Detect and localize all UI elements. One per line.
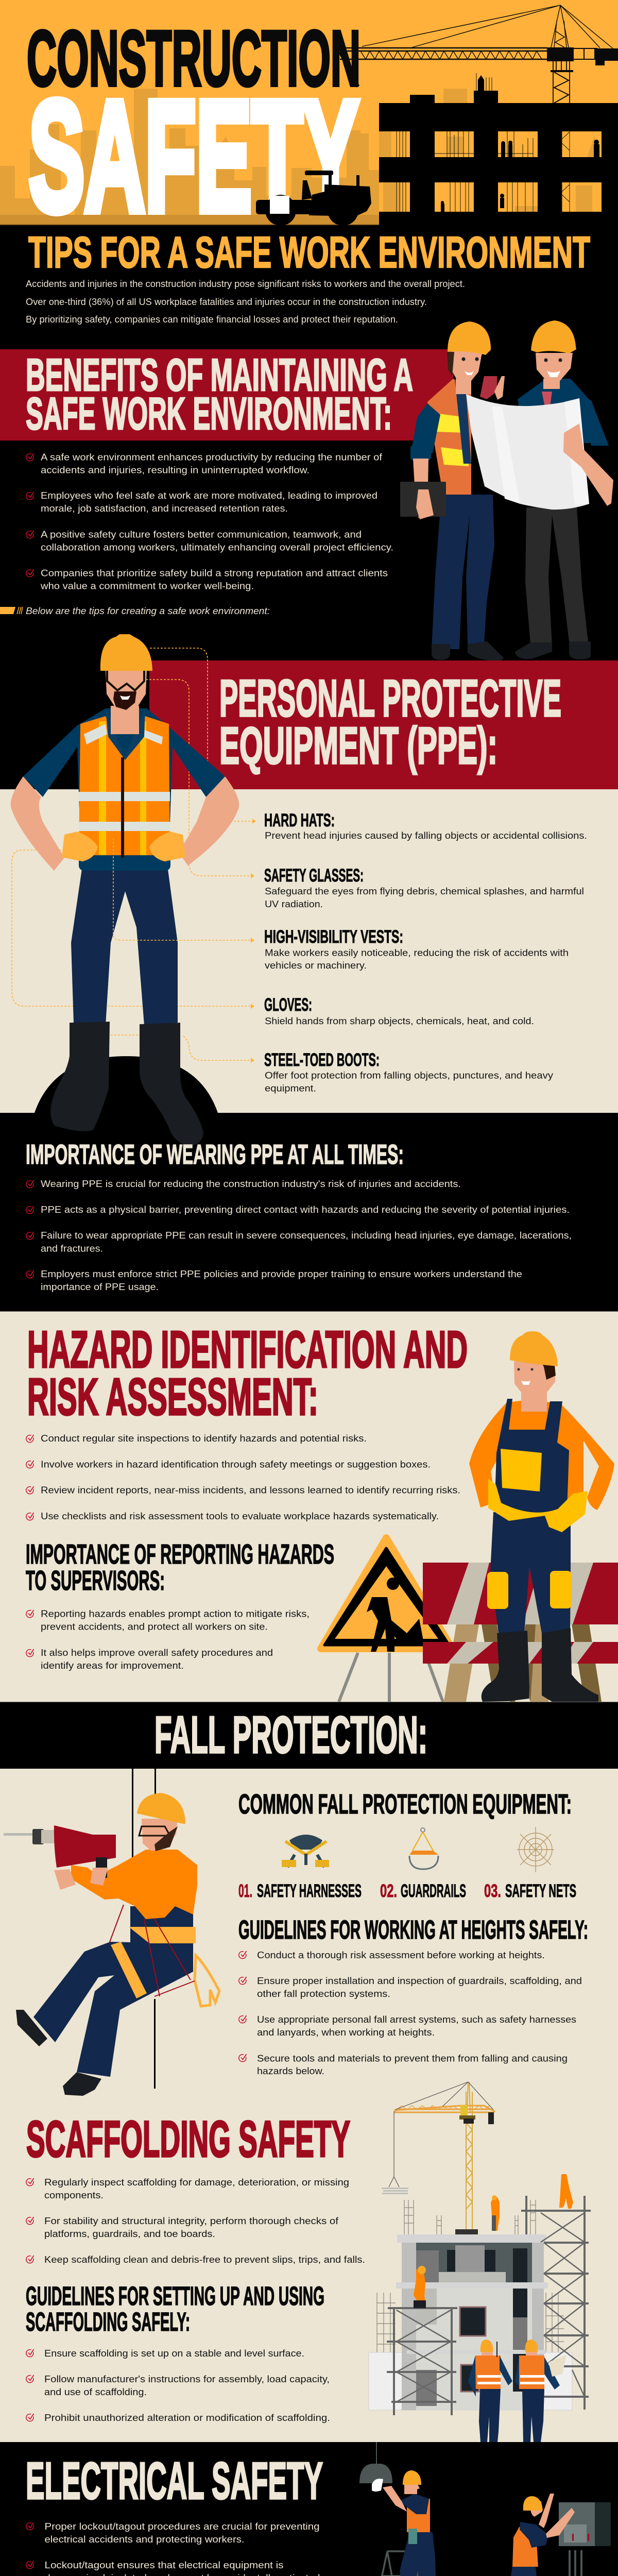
harness	[111, 1927, 196, 1998]
list: benefits: collaboration among workers, ultimately enhancing overall project efficiency.	[41, 542, 393, 552]
icon: road roller silhouette	[256, 171, 371, 226]
legend: equipment names	[238, 1881, 576, 1901]
neck and head	[521, 1386, 547, 1412]
list: heights	[239, 1950, 582, 2076]
item: high visibility vests: Make workers easily noticeable, reducing the risk of accidents with	[265, 948, 569, 958]
text block: intro: Over one-third (36%) of all US workplace fatalities and injuries occur in the construction industry.	[26, 297, 427, 307]
boots	[50, 1022, 110, 1131]
list: hazard	[26, 1433, 460, 1521]
workers small	[414, 2174, 573, 2308]
text block: intro	[26, 279, 465, 325]
heading: hazard identification: RISK ASSESSMENT:	[27, 1368, 318, 1426]
panel: fall protection cream	[0, 1769, 618, 2442]
legend: equipment names: GUARDRAILS	[401, 1881, 466, 1901]
walls	[402, 2243, 544, 2410]
list: scaffolding: components.	[44, 2190, 104, 2200]
item: safety glasses: UV radiation.	[265, 899, 323, 909]
panel: ppe cream section	[0, 789, 618, 1113]
panel: hero	[0, 0, 618, 244]
list: benefits: A positive safety culture fosters better communication, teamwork, and	[41, 530, 362, 540]
foreground supervisors	[468, 2340, 566, 2442]
vest	[79, 716, 170, 855]
item: hard hats: HARD HATS:	[264, 810, 335, 831]
list: hazard: Review incident reports, near-miss incidents, and lessons learned to identify recurring risks.	[41, 1485, 460, 1495]
heading: benefits	[26, 349, 413, 439]
heading: personal protective equipment	[219, 670, 561, 775]
pants	[71, 866, 178, 1025]
list: importance of ppe	[26, 1179, 572, 1292]
list: importance of ppe: Failure to wear appropriate PPE can result in severe consequences, including head injuries, eye damage, lacerations,	[41, 1230, 572, 1241]
shirt	[23, 708, 225, 824]
building silhouette	[379, 73, 618, 225]
list: benefits	[26, 452, 393, 591]
base	[369, 2352, 572, 2410]
item: gloves: Shield hands from sharp objects, chemicals, heat, and cold.	[265, 1016, 534, 1026]
vest connector	[113, 838, 252, 940]
illustration: worker on ropes with drill	[4, 1769, 219, 2096]
slabs	[397, 2234, 546, 2243]
knee pads	[487, 1572, 508, 1609]
list: electrical: Lockout/tagout ensures that electrical equipment is	[44, 2560, 283, 2570]
list: setting up scaffolding	[26, 2348, 330, 2423]
panel: fall protection heading band	[131, 1702, 618, 1769]
list: benefits: morale, job satisfaction, and increased retention rates.	[41, 503, 288, 514]
illustration: barricade	[423, 1563, 618, 1702]
list: importance of ppe: PPE acts as a physical barrier, preventing direct contact with hazards and reducing the severity of potential injuries.	[41, 1205, 570, 1215]
decorative dome behind boots	[35, 1056, 218, 1113]
heading: importance of reporting: TO SUPERVISORS:	[26, 1565, 165, 1596]
crane	[340, 5, 613, 103]
list: hazard: Involve workers in hazard identification through safety meetings or suggestion boxes.	[41, 1459, 431, 1469]
list: benefits: who value a commitment to worker well-being.	[40, 581, 254, 591]
list: reporting: Reporting hazards enables prompt action to mitigate risks,	[41, 1608, 310, 1619]
legend: equipment names: 02.	[380, 1881, 397, 1901]
list: heights: and lanyards, when working at heights.	[257, 2027, 435, 2038]
text block: intro: By prioritizing safety, companies can mitigate financial losses and protect their reputation.	[26, 314, 398, 325]
panel: hazard section	[0, 1312, 618, 1702]
list: setting up scaffolding: Ensure scaffolding is set up on a stable and level surface.	[44, 2348, 304, 2359]
item: safety glasses: SAFETY GLASSES:	[264, 866, 364, 886]
item: high visibility vests	[264, 927, 569, 971]
boots	[482, 1631, 529, 1702]
list: setting up scaffolding: Prohibit unauthorized alteration or modification of scaffolding.	[44, 2413, 330, 2423]
list: electrical: Proper lockout/tagout procedures are crucial for preventing	[44, 2521, 319, 2532]
list: scaffolding: Keep scaffolding clean and debris-free to prevent slips, trips, and falls.	[44, 2255, 365, 2265]
item: safety glasses	[264, 866, 584, 909]
list: heights: Secure tools and materials to prevent them from falling and causing	[257, 2054, 568, 2064]
belt and gloves	[488, 1479, 588, 1532]
pants	[490, 1512, 571, 1633]
list: reporting: identify areas for improvement.	[41, 1660, 184, 1671]
panel worker	[506, 2567, 544, 2576]
panel: ppe red banner	[149, 660, 618, 789]
list: benefits: A safe work environment enhances productivity by reducing the number of	[41, 452, 383, 463]
item: safety glasses: Safeguard the eyes from flying debris, chemical splashes, and harmful	[265, 886, 584, 896]
list: heights: Conduct a thorough risk assessment before working at heights.	[257, 1950, 545, 1960]
left torso	[427, 379, 471, 495]
list: benefits: accidents and injuries, resulting in uninterrupted workflow.	[41, 465, 310, 475]
list: reporting: It also helps improve overall safety procedures and	[41, 1648, 273, 1658]
list: importance of ppe: and fractures.	[41, 1244, 103, 1254]
heading: electrical safety: ELECTRICAL SAFETY	[26, 2452, 323, 2510]
icon: safety net	[517, 1827, 554, 1872]
letter T stem over roller	[270, 196, 289, 214]
illustration: building under construction with scaffolding	[369, 2082, 591, 2442]
list: scaffolding: platforms, guardrails, and toe boards.	[44, 2229, 215, 2239]
blueprint	[466, 394, 589, 510]
panel	[559, 2502, 611, 2546]
item: steel-toed boots: Offer foot protection from falling objects, punctures, and heavy	[265, 1071, 553, 1081]
item: high visibility vests: HIGH-VISIBILITY VESTS:	[264, 927, 403, 947]
list: heights: hazards below.	[257, 2066, 324, 2076]
list: electrical	[26, 2521, 339, 2576]
neck and head	[142, 1819, 178, 1851]
list: benefits: Employees who feel safe at work are more motivated, leading to improved	[41, 490, 377, 501]
ladder	[364, 2551, 440, 2576]
text block: intro: Accidents and injuries in the construction industry pose significant risks to workers and the overall project.	[26, 279, 465, 289]
arrowheads	[251, 819, 256, 1063]
left head	[451, 350, 483, 383]
item: hard hats: Prevent head injuries caused by falling objects or accidental collisions.	[265, 831, 587, 841]
list: benefits: Companies that prioritize safety build a strong reputation and attract clients	[41, 568, 388, 578]
list: hazard: Use checklists and risk assessment tools to evaluate workplace hazards systematically.	[41, 1511, 439, 1521]
item: gloves: GLOVES:	[264, 995, 312, 1015]
icon: guardrail with seat	[409, 1828, 438, 1869]
legend: equipment names: 01.	[238, 1881, 252, 1901]
right person	[518, 379, 591, 443]
bib	[494, 1399, 569, 1525]
illustration: electricians on ladder and at panel	[359, 2442, 611, 2576]
item: high visibility vests: vehicles or machinery.	[265, 960, 367, 971]
right scaffold	[521, 2196, 591, 2410]
legs	[33, 1942, 193, 2077]
heading: scaffolding safety: SCAFFOLDING SAFETY	[26, 2110, 350, 2167]
left person pants	[432, 495, 494, 649]
list: reporting	[26, 1608, 310, 1671]
icon: harness	[282, 1835, 329, 1867]
hard hat	[510, 1331, 558, 1366]
illustration: ppe worker	[11, 634, 252, 1146]
list: heights: Ensure proper installation and inspection of guardrails, scaffolding, and	[257, 1976, 582, 1986]
heading: importance of reporting: IMPORTANCE OF REPORTING HAZARDS	[26, 1539, 334, 1570]
shirt and arms	[469, 1399, 614, 1510]
heading: guidelines for scaffolding: SCAFFOLDING SAFELY:	[26, 2307, 190, 2336]
item: steel-toed boots: STEEL-TOED BOOTS:	[264, 1050, 380, 1070]
list: hazard: Conduct regular site inspections to identify hazards and potential risks.	[41, 1433, 367, 1444]
item: gloves	[264, 995, 534, 1026]
connector lines from worker to items	[12, 648, 252, 1060]
list: scaffolding: Regularly inspect scaffolding for damage, deterioration, or missing	[44, 2177, 349, 2188]
heading: guidelines for scaffolding	[26, 2281, 324, 2336]
item: hard hats	[264, 810, 587, 841]
callout: below are the tips: Below are the tips for creating a safe work environment:	[26, 606, 270, 616]
panel: benefits banner	[0, 349, 453, 440]
icon: work zone sign	[321, 1538, 452, 1702]
phone	[480, 376, 497, 399]
drill	[4, 1833, 32, 1836]
legend: equipment names: 03.	[484, 1881, 501, 1901]
skyline	[0, 89, 467, 225]
illustration: hazard worker with overalls	[469, 1331, 614, 1702]
list: reporting: prevent accidents, and protect all workers on site.	[41, 1622, 268, 1632]
list: scaffolding: For stability and structural integrity, perform thorough checks of	[44, 2216, 339, 2226]
heading: guidelines for scaffolding: GUIDELINES FOR SETTING UP AND USING	[26, 2281, 324, 2311]
neck and head	[111, 706, 139, 734]
item: steel-toed boots	[264, 1050, 553, 1093]
list: scaffolding	[26, 2177, 365, 2265]
rebar	[377, 2200, 564, 2352]
gloves	[62, 832, 98, 861]
list: importance of ppe: importance of PPE usage.	[41, 1282, 159, 1292]
torso	[130, 1906, 193, 1947]
list: heights: other fall protection systems.	[257, 1989, 390, 1999]
item: steel-toed boots: equipment.	[265, 1083, 316, 1093]
hard hat	[100, 634, 152, 671]
left scaffold	[387, 2308, 457, 2415]
list: importance of ppe: Employers must enforce strict PPE policies and provide proper training to ensure workers understand the	[41, 1269, 522, 1279]
list: heights: Use appropriate personal fall arrest systems, such as safety harnesses	[257, 2014, 576, 2025]
legend: equipment names: SAFETY HARNESSES	[257, 1881, 362, 1901]
heading: hazard identification	[27, 1321, 468, 1426]
list: setting up scaffolding: Follow manufacturer's instructions for assembly, load capacity,	[44, 2374, 330, 2384]
list: electrical: electrical accidents and protecting workers.	[44, 2534, 245, 2545]
arms	[11, 776, 64, 871]
list: setting up scaffolding: and use of scaffolding.	[44, 2387, 147, 2397]
heading: importance of reporting	[26, 1539, 334, 1596]
list: importance of ppe: Wearing PPE is crucial for reducing the construction industry's risk of injuries and accidents.	[41, 1179, 461, 1189]
illustration: two workers with blueprint	[400, 320, 613, 661]
tower crane	[466, 2082, 472, 2229]
worker on ladder	[400, 2532, 437, 2576]
right person pants	[525, 507, 588, 647]
